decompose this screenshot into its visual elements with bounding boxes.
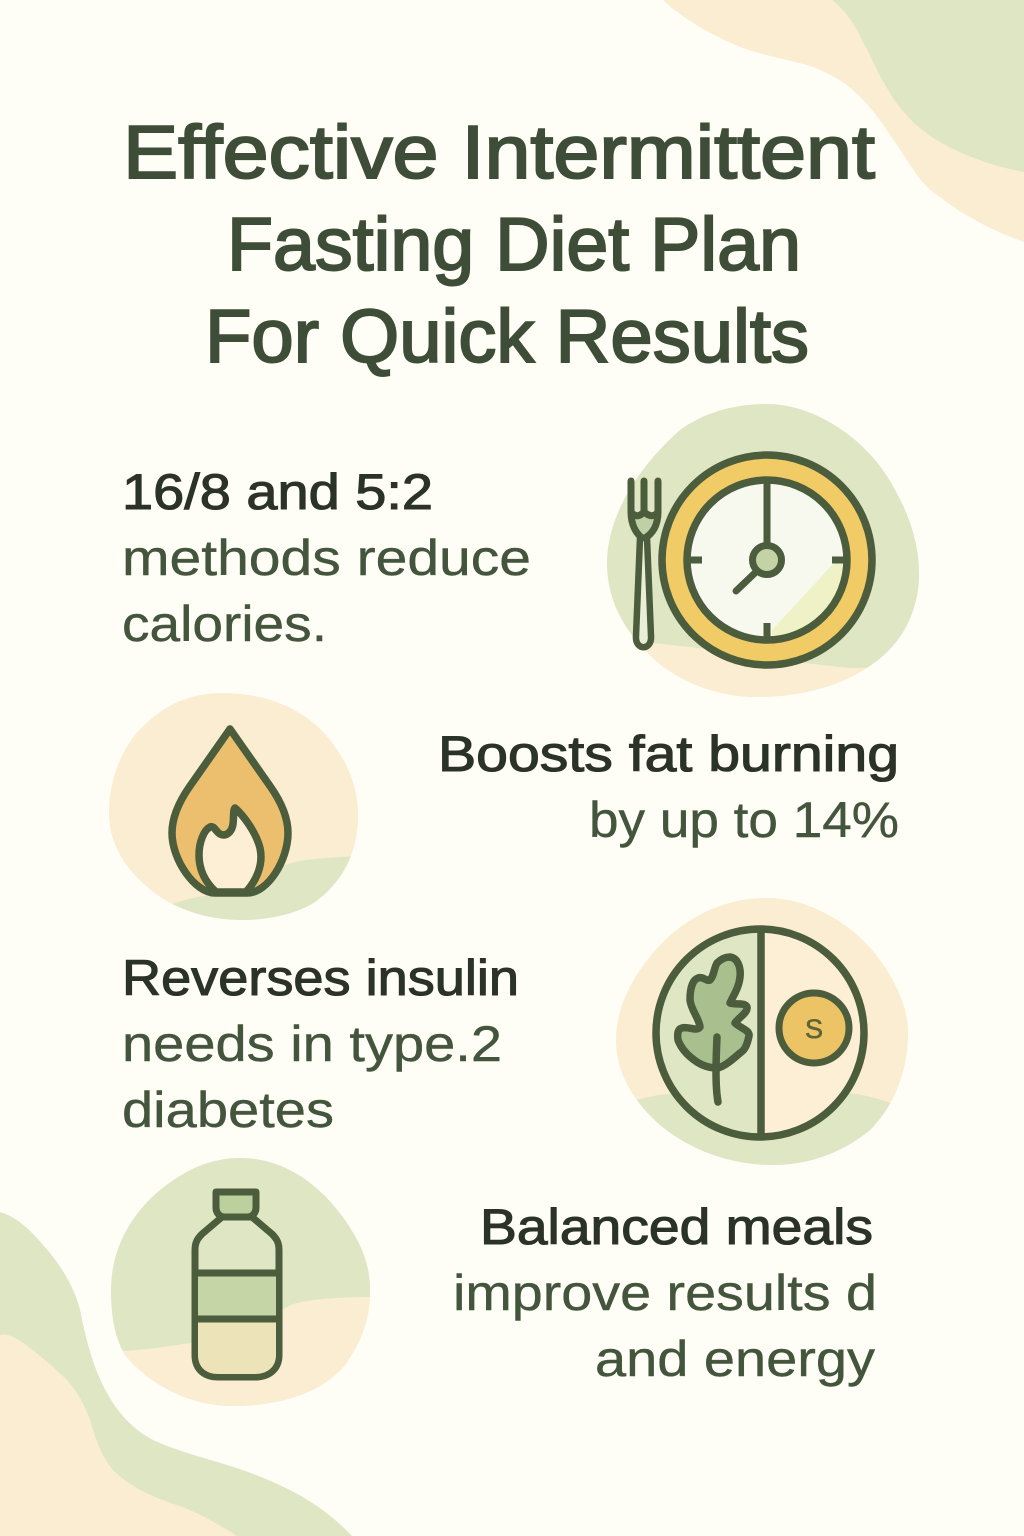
- text block: 16/8 and 5:2 methods: 16/8 and 5:2: [122, 464, 433, 520]
- plate halves: [657, 929, 761, 1137]
- bottom-left background shapes: [0, 1212, 352, 1536]
- title: [123, 110, 875, 378]
- outer flame: [172, 729, 288, 893]
- text block: 16/8 and 5:2 methods: [122, 464, 531, 652]
- icon: clock plate and fork: [600, 400, 930, 705]
- text block: balanced meals: Balanced meals: [480, 1199, 873, 1255]
- title: For Quick Results: [205, 294, 809, 378]
- text block: boosts fat burning: Boosts fat burning: [438, 726, 899, 782]
- text block: 16/8 and 5:2 methods: methods reduce: [122, 530, 531, 586]
- plate ring: [662, 455, 872, 665]
- inner flame: [199, 808, 261, 892]
- text block: 16/8 and 5:2 methods: calories.: [122, 596, 327, 652]
- title: Effective Intermittent: [123, 110, 875, 194]
- text block: reverses insulin: diabetes: [122, 1082, 334, 1138]
- text block: boosts fat burning: by up to 14%: [589, 792, 899, 848]
- icon: water bottle: [105, 1155, 375, 1410]
- text block: balanced meals: [453, 1199, 877, 1387]
- fork: [631, 481, 658, 647]
- bottle cap: [216, 1192, 256, 1217]
- bottle body: [195, 1217, 279, 1377]
- text block: reverses insulin: needs in type.2: [122, 1016, 502, 1072]
- icon: balanced plate: [616, 898, 908, 1165]
- text block: balanced meals: and energy: [595, 1331, 875, 1387]
- coin: [779, 993, 849, 1063]
- coin: S: [805, 1014, 823, 1044]
- text block: balanced meals: improve results d: [453, 1265, 877, 1321]
- leaf: [678, 957, 749, 1102]
- clock face: [687, 480, 847, 640]
- text block: reverses insulin: [122, 950, 519, 1138]
- text block: boosts fat burning: [438, 726, 899, 848]
- title: Fasting Diet Plan: [227, 202, 801, 286]
- clock hands and ticks: [685, 482, 849, 640]
- icon: flame: [109, 693, 358, 920]
- bottle label band: [198, 1274, 276, 1319]
- text block: reverses insulin: Reverses insulin: [122, 950, 519, 1006]
- top-right background shapes: [663, 0, 1024, 242]
